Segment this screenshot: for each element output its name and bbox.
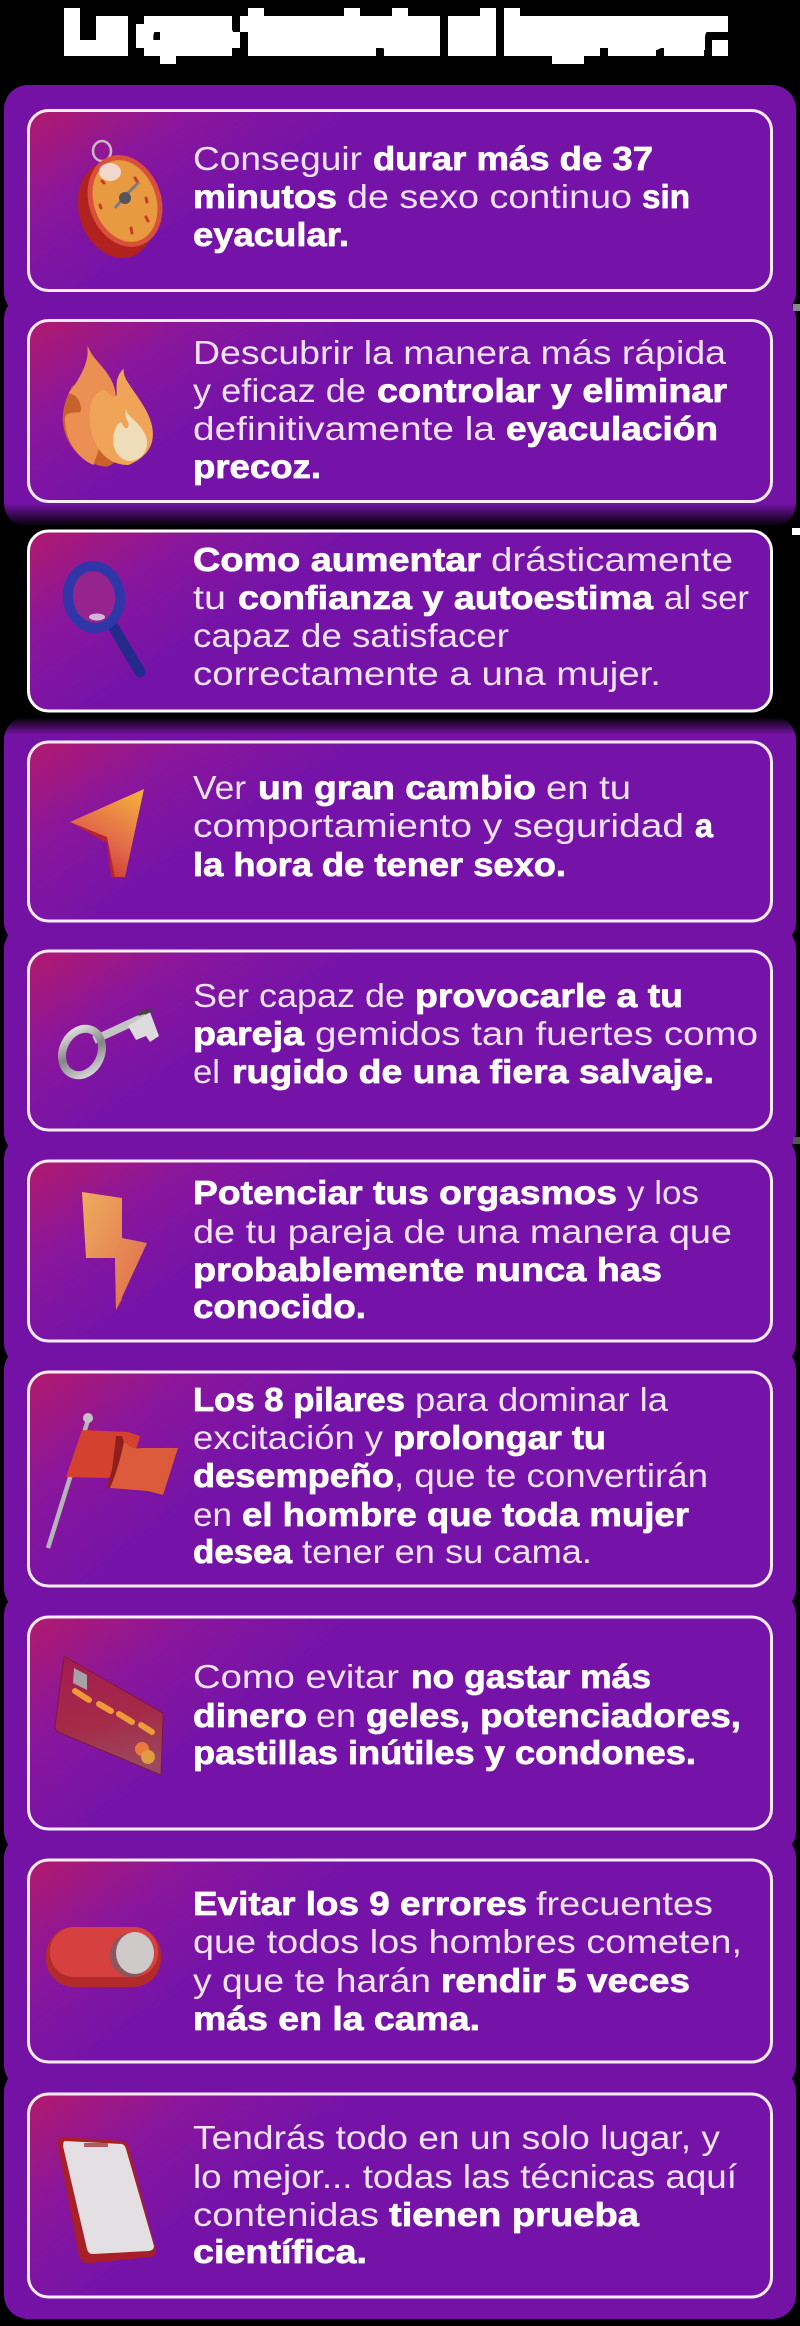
text: card 6: conocido. [193,1288,366,1325]
text: card 6: y los [627,1174,699,1211]
text: card 3: confianza y autoestima [238,579,654,616]
text: card 2: Descubrir la manera más rápida [193,334,727,371]
text: card 1: eyacular. [193,216,349,253]
text: card 7: Los 8 pilares [193,1381,405,1418]
text: card 1: durar más de 37 [373,140,653,177]
text: card 1 [193,140,690,253]
text: card 4: la hora de tener sexo. [193,846,566,883]
text: card 5: gemidos tan fuertes como [315,1015,758,1052]
text: card 8: geles, potenciadores, [366,1697,741,1734]
text: card 10: contenidas [193,2196,379,2233]
icon: key [55,1010,159,1082]
icon: credit card [55,1656,163,1775]
text: card 7: desea [193,1533,293,1570]
text: card 9: y que te harán [193,1962,431,1999]
text: card 7: en [193,1496,232,1533]
icon: flame [63,345,153,467]
panel: card 3 magnifier [28,531,772,711]
text: card 3: capaz de satisfacer [193,617,509,654]
panel: card 1 stopwatch [28,110,772,290]
text: card 4: comportamiento y seguridad [193,807,684,844]
text: card 8: pastillas inútiles y condones. [193,1734,696,1771]
text: card 3 [193,541,749,692]
icon: lightning bolt [82,1192,147,1310]
text: card 9 [193,1885,742,2037]
text: card 9: frecuentes [536,1885,713,1922]
text: card 7: desempeño [193,1457,394,1494]
text: card 1: Conseguir [193,140,362,177]
text: card 8 [193,1658,741,1771]
text: card 8: dinero [193,1697,307,1734]
panel: card 9 toggle [28,1860,772,2062]
text: card 1: de sexo continuo [347,178,632,215]
text: card 1: sin [642,178,690,215]
text: card 3: al ser [664,579,749,616]
icon: phone [58,2137,156,2263]
text: card 8: no gastar más [411,1658,651,1695]
text: card 3: drásticamente [491,541,733,578]
title: Lo que tendrás al ingresar. [66,8,726,60]
text: card 2 [193,334,727,485]
text: card 2: controlar y eliminar [377,372,727,409]
text: card 9: más en la cama. [193,2000,480,2037]
text: card 6 [193,1174,732,1325]
text: card 5 [193,977,758,1090]
text: card 6: probablemente nunca has [193,1251,662,1288]
text: card 2: definitivamente la [193,410,496,447]
text: card 3: tu [193,579,226,616]
text: card 5: provocarle a tu [415,977,683,1014]
text: card 7: excitación y [193,1419,384,1456]
text: card 7: para dominar la [415,1381,669,1418]
text: card 9: Evitar los 9 errores [193,1885,527,1922]
text: card 4: en tu [546,769,631,806]
panel: card 8 credit card [28,1617,772,1829]
text: card 10: científica. [193,2233,367,2270]
text: card 10: lo mejor... todas las técnicas aquí [193,2158,737,2195]
icon: magnifying glass [64,563,140,672]
text: card 7: el hombre que toda mujer [242,1496,689,1533]
panel: card 4 arrow [28,742,772,921]
panel: card 10 phone [28,2094,772,2297]
text: card 4: un gran cambio [258,769,536,806]
text: card 5: el [193,1053,220,1090]
text: card 1: minutos [193,178,337,215]
text: card 9: rendir 5 veces [441,1962,690,1999]
text: card 3: correctamente a una mujer. [193,655,661,692]
panel: card 5 key [28,951,772,1130]
text: card 4: a [695,807,714,844]
text: card 4: Ver [193,769,246,806]
text: card 7: , que te convertirán [394,1457,708,1494]
text: card 7: tener en su cama. [302,1533,592,1570]
text: card 5: pareja [193,1015,305,1052]
text: card 2: precoz. [193,448,321,485]
text: card 7: prolongar tu [393,1419,606,1456]
panel: card 2 flame [28,320,772,502]
text: card 5: Ser capaz de [193,977,405,1014]
text: card 2: eyaculación [506,410,718,447]
text: card 7 [193,1381,708,1570]
text: card 8: en [316,1697,356,1734]
panel: card 7 flag [28,1372,772,1586]
icon: flag [48,1413,178,1548]
text: card 4 [193,769,714,883]
text: card 6: Potenciar tus orgasmos [193,1174,617,1211]
panel: card 6 bolt [28,1161,772,1341]
text: card 10: tienen prueba [389,2196,640,2233]
text: card 3: Como aumentar [193,541,481,578]
text: card 10 [193,2119,737,2270]
text: card 6: de tu pareja de una manera que [193,1213,732,1250]
text: card 9: que todos los hombres cometen, [193,1923,742,1960]
text: card 2: y eficaz de [193,372,366,409]
icon: stopwatch [66,141,175,268]
icon: navigation arrow [70,789,144,877]
text: card 8: Como evitar [193,1658,399,1695]
text: card 10: Tendrás todo en un solo lugar, y [193,2119,721,2156]
icon: toggle switch [46,1927,161,1987]
text: card 5: rugido de una fiera salvaje. [232,1053,714,1090]
